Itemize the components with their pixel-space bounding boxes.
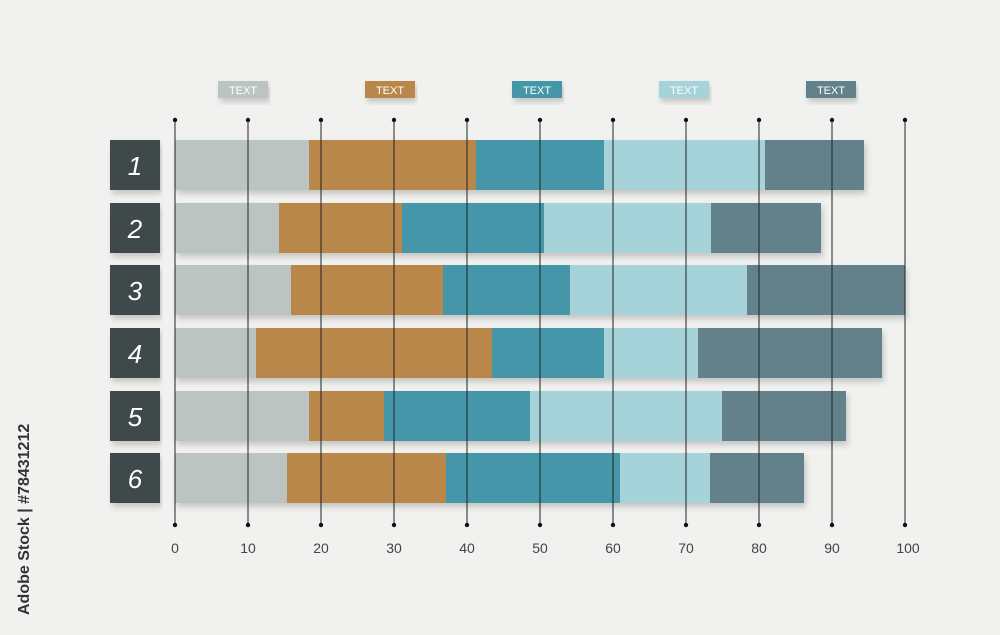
legend: TEXT: [670, 85, 698, 97]
axis labels: 0: [171, 540, 179, 556]
legend: TEXT: [376, 85, 404, 97]
row labels: 3: [128, 276, 143, 306]
axis labels: 50: [532, 540, 548, 556]
legend: [218, 81, 856, 98]
axis labels: 80: [751, 540, 767, 556]
axis labels: 60: [605, 540, 621, 556]
axis labels: 70: [678, 540, 694, 556]
axis labels: 100: [896, 540, 920, 556]
row labels: 5: [128, 402, 143, 432]
axis labels: 30: [386, 540, 402, 556]
axis labels: 10: [240, 540, 256, 556]
row labels: 2: [127, 214, 143, 244]
legend: TEXT: [817, 85, 845, 97]
legend: TEXT: [229, 85, 257, 97]
row labels: 1: [128, 151, 142, 181]
stacked bar chart: [175, 140, 905, 503]
axis labels: [171, 540, 920, 556]
row labels: [110, 140, 160, 503]
legend: TEXT: [523, 85, 551, 97]
axis labels: 90: [824, 540, 840, 556]
row labels: 4: [128, 339, 142, 369]
row labels: 6: [128, 464, 143, 494]
axis labels: 20: [313, 540, 329, 556]
watermark id: Adobe Stock | #78431212: [16, 424, 33, 615]
axis labels: 40: [459, 540, 475, 556]
